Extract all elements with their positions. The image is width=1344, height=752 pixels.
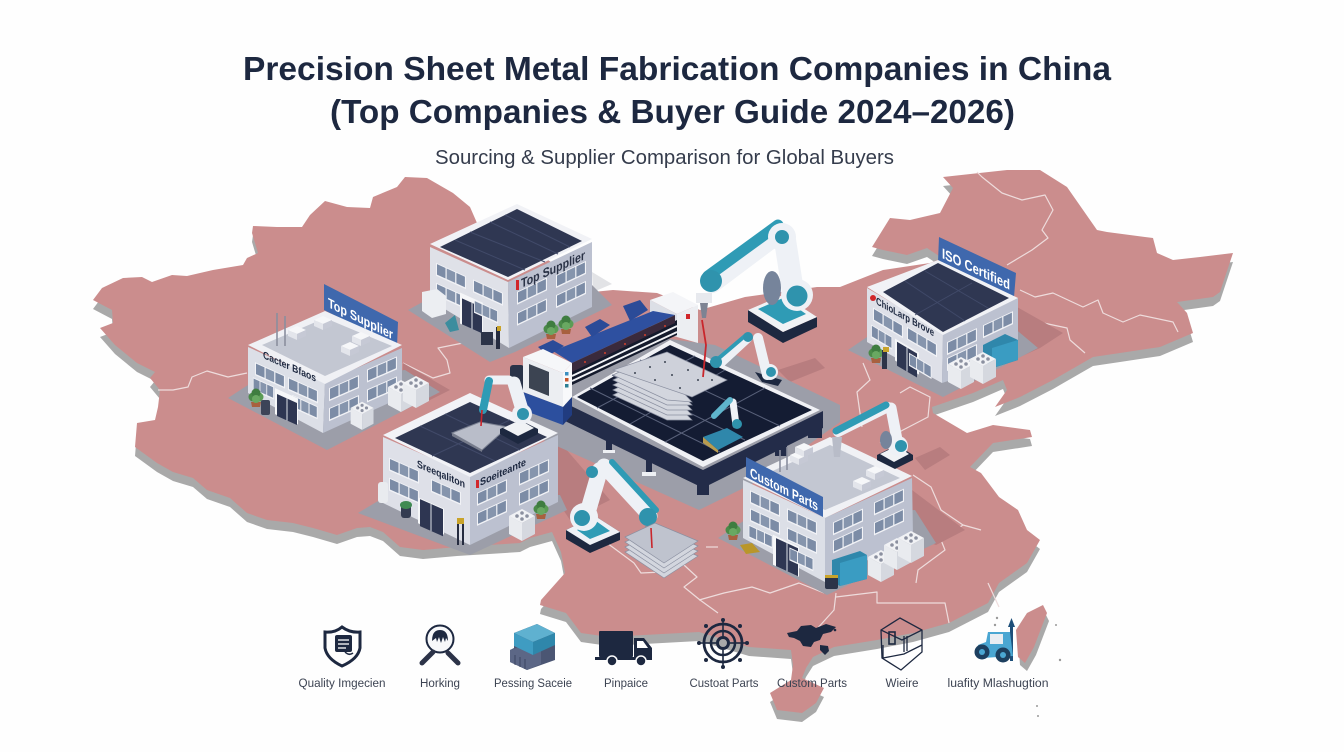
label: Quality Imgecien: Quality Imgecien [298,676,386,690]
title [243,51,1111,131]
label: luafity Mlashugtion: luafity Mlashugtion [948,676,1049,690]
factory: ISO Certified [867,237,1018,389]
gantry [538,300,677,385]
plate stack [625,523,698,578]
solar roof [440,209,582,277]
map: mainland surface [93,170,1233,713]
machine frame and legs [565,403,823,495]
sign: Custom Parts: Custom Parts [750,466,818,515]
robot arm: tiny with pallet [703,400,743,453]
yard: container, chillers, plant [868,334,1018,389]
sign: Top Supplier [324,284,398,347]
building shadows and ground pads [228,272,1063,595]
title line 1: Precision Sheet Metal Fabrication Companies in China [243,51,1111,88]
icon: truck [595,631,652,666]
subtitle: Sourcing & Supplier Comparison for Global Buyers [435,147,894,169]
sign: Top Supplier: Top Supplier [328,296,393,343]
icon: forklift tractor [974,618,1015,662]
icon: shield [325,627,360,666]
sign: Custom Parts [746,457,823,517]
map: small islands [994,617,1061,717]
plate on roof [452,422,508,452]
robot arm: small on bed [710,332,782,386]
label: Pessing Saceie: Pessing Saceie [494,676,572,690]
laser cutting machine [510,292,823,495]
control cabinet [510,349,572,425]
title line 2: (Top Companies & Buyer Guide 2024–2026) [330,94,1015,131]
map of China [93,170,1233,722]
robot arm: right of centre [832,405,913,469]
red laser beam [702,320,706,377]
map: grey extruded edge [93,179,1233,722]
text: Soeiteante: Soeiteante [480,457,526,489]
rooftop units [277,313,370,356]
factory: top centre [422,204,592,349]
rooftop units [780,443,884,491]
text: Sreeqaliton: Sreeqaliton [417,458,465,491]
label: Horking: Horking [420,676,460,690]
cutting bed [572,340,820,467]
text: Top Supplier: Top Supplier [521,248,586,291]
text: ChioLarp Brove: ChioLarp Brove [876,296,934,339]
icon labels [298,676,1049,690]
icon: target wheel [697,618,749,669]
sign: ISO Certified [938,237,1016,297]
label: Wieire: Wieire [886,676,919,690]
label: Custom Parts: Custom Parts [777,676,847,690]
map: Taiwan [1016,605,1047,663]
solar roof [395,402,547,473]
stacked metal sheets [613,352,727,420]
label: Pinpaice: Pinpaice [604,676,648,690]
icon: magnifier [422,626,458,663]
yard equipment [378,482,548,545]
sign: ISO Certified: ISO Certified [942,246,1010,294]
icon: world map [787,624,836,655]
factory: Top Supplier left [248,284,429,434]
yard: container, chillers, plant [726,522,924,589]
label: Custoat Parts: Custoat Parts [690,676,758,690]
icon: containers [510,624,555,670]
yard equipment [422,289,574,349]
map: province borders [158,172,1178,630]
icon row [325,618,1015,670]
yard chillers and plants [248,376,429,430]
factory: Custom Parts [726,437,924,589]
icon: wire frame box [881,618,922,670]
factory: lower left [378,393,558,545]
solar roof [883,263,1009,332]
robot arm: on roof lower left [481,380,538,444]
text: Cacter Bfaos: Cacter Bfaos [263,349,316,385]
rear control box [650,292,698,343]
robot arm: large top [696,223,817,343]
robot arm: lower centre [566,462,698,578]
